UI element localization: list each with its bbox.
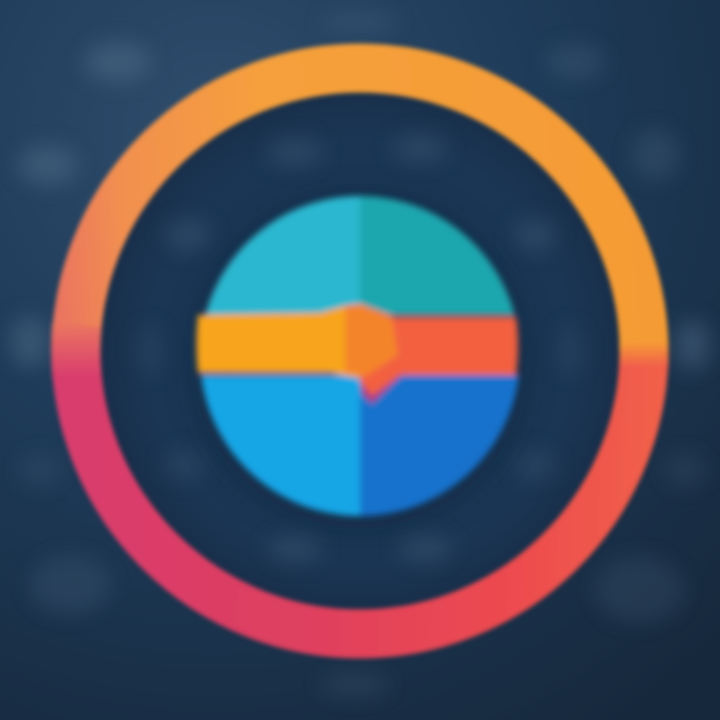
ring [76, 68, 644, 634]
band: centre orange highlight [345, 304, 398, 376]
ring: left colour transition [76, 325, 77, 378]
ring inner dark field [98, 88, 622, 612]
disc: bottom left blue [190, 375, 360, 525]
disc: purple notch [360, 372, 405, 404]
disc: top right teal [360, 190, 530, 315]
band: left orange [196, 304, 360, 378]
ring: orange upper half [76, 68, 644, 352]
central disc [190, 190, 530, 525]
inner field blurred marks [134, 134, 586, 562]
disc shadow [194, 196, 526, 528]
disc: top left teal [190, 190, 360, 315]
disc: bottom right blue [360, 375, 530, 525]
ring: red lower half [76, 350, 644, 634]
band: right red-orange [360, 304, 518, 396]
ring: right colour transition [619, 342, 668, 366]
